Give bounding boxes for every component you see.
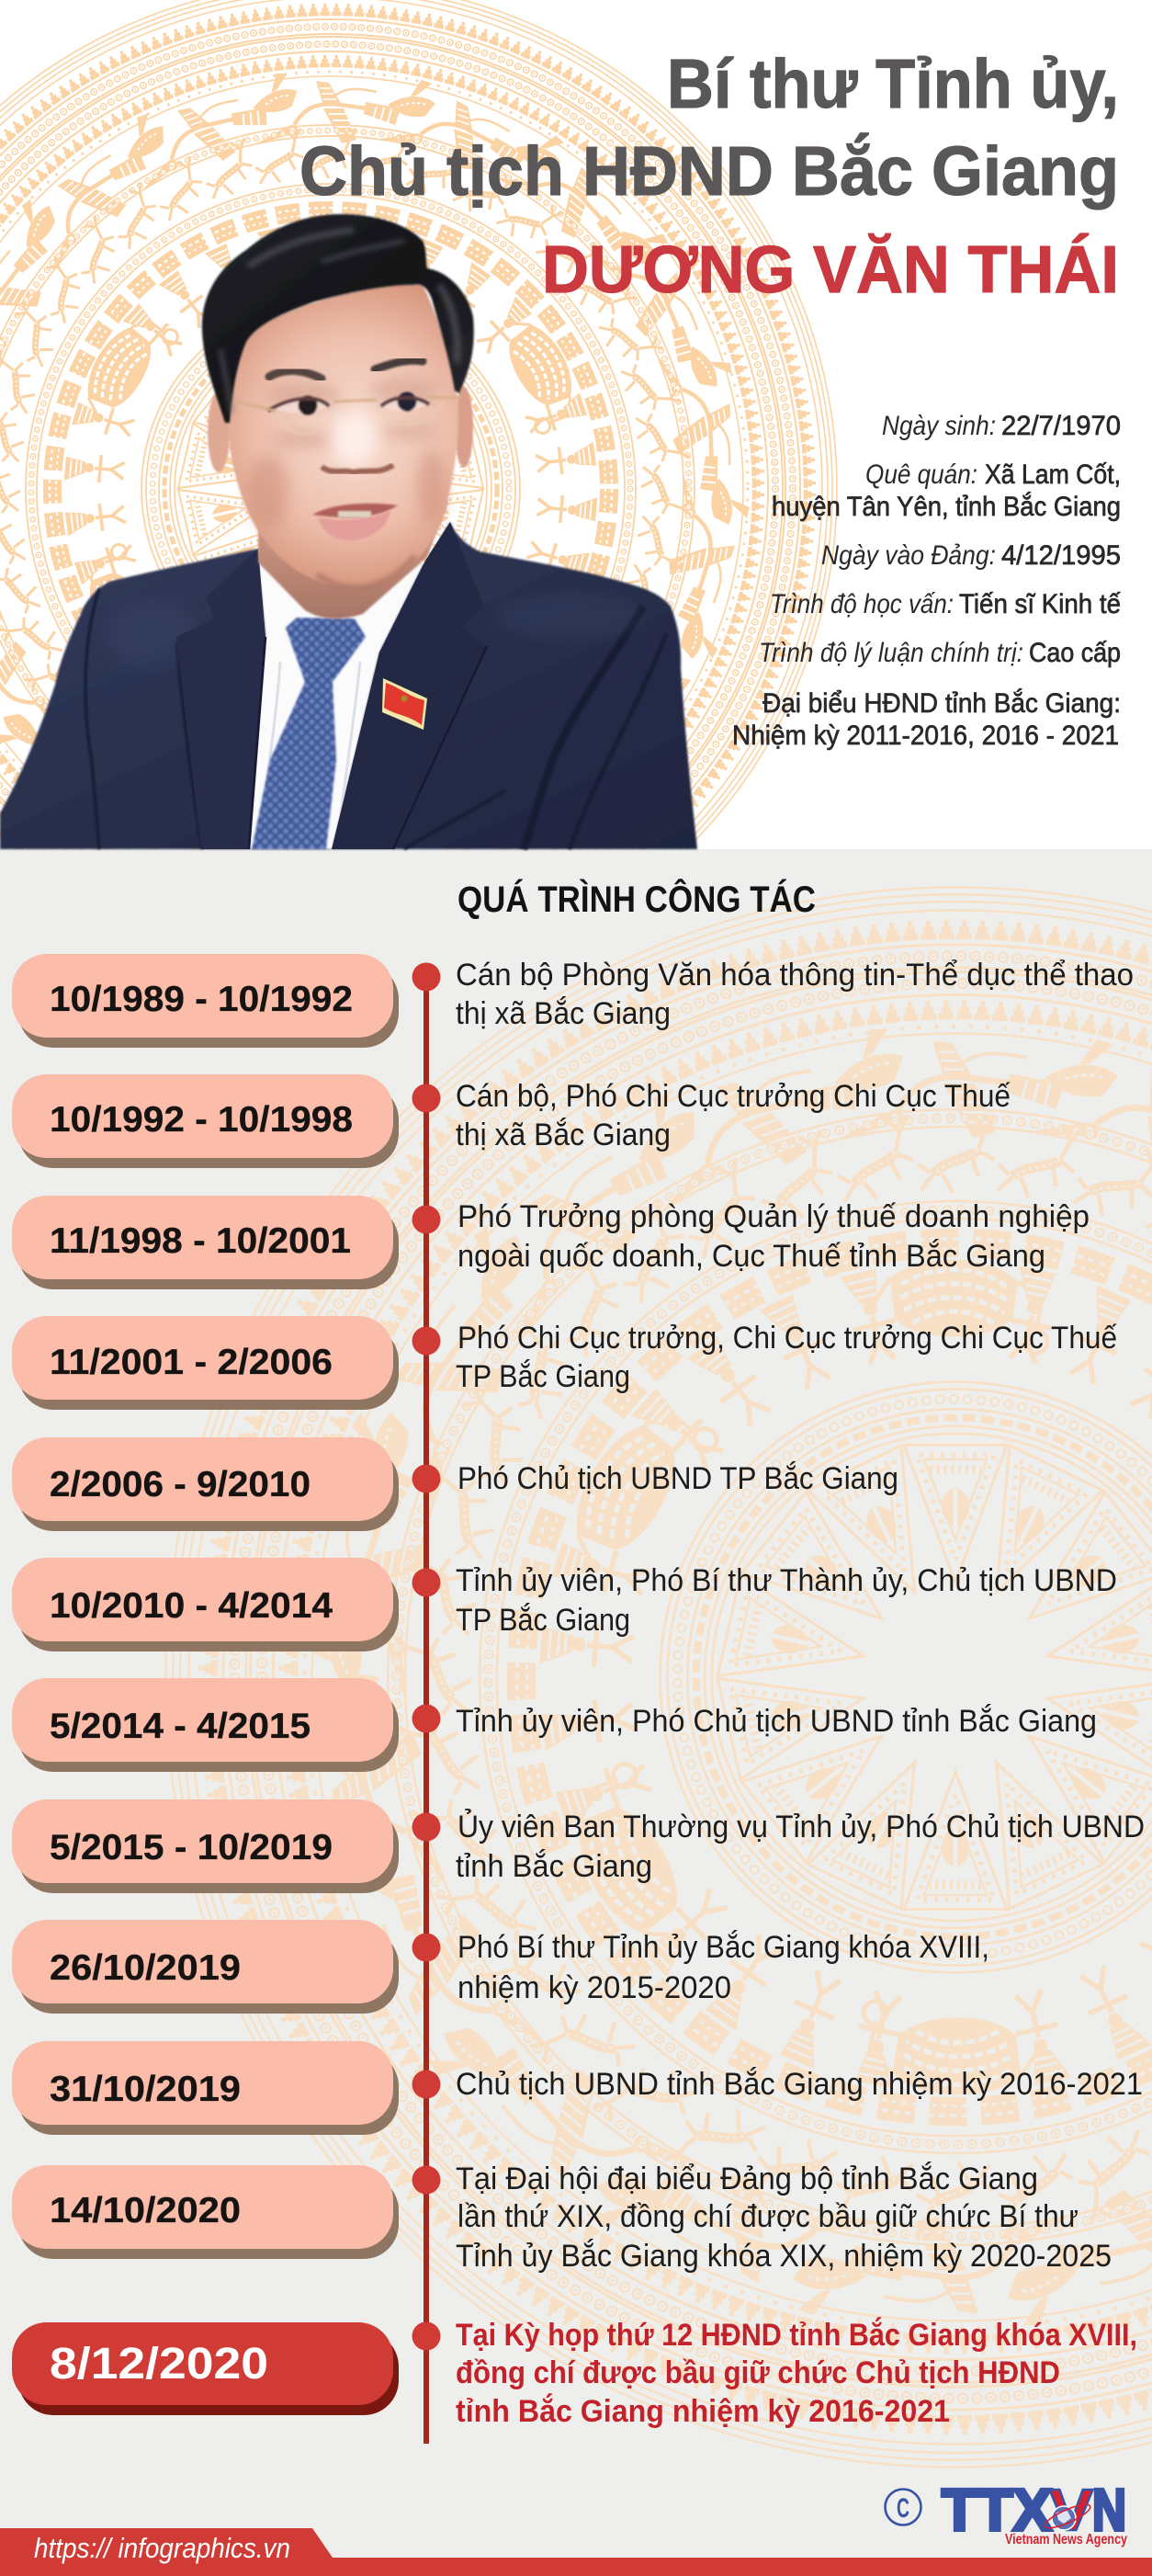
jacket folds and seams	[85, 588, 666, 849]
date pill	[12, 1799, 399, 1893]
marker dot	[412, 1465, 441, 1492]
date pill: 11/2001 - 2/2006	[50, 1343, 333, 1382]
description: TP Bắc Giang	[456, 1359, 630, 1394]
logo: TTXVN	[886, 2477, 1127, 2548]
date pill: 8/12/2020	[50, 2340, 268, 2389]
marker dot	[412, 1568, 441, 1597]
website url: https:// infographics.vn	[34, 2532, 290, 2564]
left lapel	[176, 549, 265, 849]
party entry date: 4/12/1995	[1001, 540, 1121, 571]
date pill	[12, 1920, 399, 2014]
description: Tại Đại hội đại biểu Đảng bộ tỉnh Bắc Giang	[456, 2162, 1038, 2196]
birth date	[882, 411, 1121, 441]
globe	[1042, 2501, 1093, 2532]
date pill: 31/10/2019	[50, 2070, 241, 2109]
marker dot	[412, 2321, 441, 2351]
description: Phó Trưởng phòng Quản lý thuế doanh nghiệp	[457, 1199, 1090, 1234]
hometown	[772, 460, 1121, 522]
date pill: 11/1998 - 10/2001	[50, 1221, 351, 1261]
date pill	[12, 2041, 399, 2135]
date pill: 14/10/2020	[50, 2191, 241, 2230]
marker dot	[412, 1206, 441, 1233]
date pill: 10/1989 - 10/1992	[50, 980, 353, 1019]
portrait photo	[0, 214, 697, 849]
marker dot	[412, 1327, 441, 1355]
description: Tỉnh ủy Bắc Giang khóa XIX, nhiệm kỳ 2020-2025	[456, 2239, 1112, 2274]
marker dot	[412, 963, 441, 991]
title	[299, 45, 1119, 307]
agency letters: V	[1049, 2477, 1093, 2543]
hair highlights	[220, 230, 457, 414]
timeline axis	[424, 977, 429, 2444]
nose highlight	[333, 412, 377, 467]
agency letters	[942, 2477, 1126, 2543]
education	[770, 589, 1121, 619]
timeline row 3	[12, 1196, 1090, 1289]
cheek shading	[248, 450, 446, 528]
left eyebrow	[269, 370, 322, 379]
description	[457, 1930, 989, 2005]
chin crease	[317, 556, 415, 587]
title line 1: Bí thư Tỉnh ủy,	[667, 45, 1119, 122]
birth date: 22/7/1970	[1001, 411, 1121, 441]
marker dot	[412, 1812, 441, 1842]
education: Tiến sĩ Kinh tế	[959, 589, 1121, 619]
political theory level: Cao cấp	[1029, 638, 1121, 668]
flag pin	[382, 678, 427, 730]
left eye	[268, 395, 329, 415]
date pill	[12, 1196, 399, 1289]
date pill	[12, 954, 399, 1048]
right eyebrow	[375, 360, 423, 369]
shirt	[249, 561, 425, 849]
agency letters: N	[1092, 2477, 1126, 2543]
copyright mark: C	[897, 2493, 909, 2524]
white header background	[0, 0, 1152, 849]
date pill: 5/2014 - 4/2015	[50, 1707, 311, 1746]
description: Phó Chủ tịch UBND TP Bắc Giang	[457, 1461, 898, 1496]
timeline row 6	[12, 1558, 1117, 1651]
party entry date: Ngày vào Đảng:	[821, 540, 996, 571]
description: Phó Chi Cục trưởng, Chi Cục trưởng Chi Cục Thuế	[457, 1321, 1117, 1356]
nostrils	[322, 465, 393, 472]
date pill: 2/2006 - 9/2010	[50, 1465, 311, 1504]
party entry date	[821, 540, 1121, 571]
timeline row 2	[12, 1074, 1011, 1168]
section heading: QUÁ TRÌNH CÔNG TÁC	[457, 878, 816, 920]
description	[456, 2162, 1112, 2274]
timeline row 12: highlighted	[12, 2318, 1137, 2429]
right lapel	[332, 522, 487, 849]
marker dot	[412, 1934, 441, 1961]
description	[457, 1199, 1090, 1274]
right ear	[455, 387, 473, 468]
marker dot	[412, 1704, 441, 1733]
date pill: 10/1992 - 10/1998	[50, 1100, 353, 1140]
date pill	[12, 1558, 399, 1651]
copyright mark	[886, 2489, 920, 2525]
education: Trình độ học vấn:	[770, 589, 954, 619]
timeline row 9	[12, 1920, 989, 2014]
jacket	[0, 522, 697, 849]
description: Tỉnh ủy viên, Phó Bí thư Thành ủy, Chủ tịch UBND	[456, 1563, 1117, 1598]
glasses	[236, 397, 459, 434]
hometown: huyện Tân Yên, tỉnh Bắc Giang	[772, 492, 1121, 522]
description: Cán bộ Phòng Văn hóa thông tin-Thể dục thể thao	[456, 958, 1134, 993]
birth date: Ngày sinh:	[882, 411, 996, 441]
hometown: Xã Lam Cốt,	[985, 460, 1121, 490]
face	[227, 284, 458, 587]
date pill: 5/2015 - 10/2019	[50, 1828, 333, 1867]
date pill: 26/10/2019	[50, 1948, 241, 1988]
lower lip	[318, 511, 390, 540]
red ribbon	[0, 2528, 1152, 2576]
description: TP Bắc Giang	[456, 1603, 630, 1638]
timeline row 5	[12, 1437, 898, 1531]
description: Tỉnh ủy viên, Phó Chủ tịch UBND tỉnh Bắc Giang	[456, 1704, 1097, 1739]
council delegate terms: Nhiệm kỳ 2011-2016, 2016 - 2021	[732, 721, 1119, 751]
description	[456, 1563, 1117, 1638]
description: thị xã Bắc Giang	[456, 996, 671, 1031]
description	[456, 1321, 1117, 1394]
description: ngoài quốc doanh, Cục Thuế tỉnh Bắc Giang	[457, 1239, 1045, 1274]
hometown: Quê quán:	[865, 460, 977, 490]
eye socket shading	[265, 379, 439, 448]
neck	[258, 501, 448, 618]
upper lip	[312, 504, 398, 517]
footer bar	[0, 2528, 1152, 2576]
timeline row 8	[12, 1799, 1145, 1893]
timeline row 11	[12, 2162, 1112, 2274]
description	[456, 1079, 1011, 1152]
biography text block	[732, 411, 1121, 751]
marker dot	[412, 2165, 441, 2195]
bronze drum pattern: career panel	[165, 887, 1152, 2468]
date pill	[12, 1437, 399, 1531]
date pill	[12, 2322, 399, 2415]
timeline row 1	[12, 954, 1134, 1048]
timeline row 7	[12, 1678, 1097, 1772]
hair	[202, 214, 474, 423]
description: lần thứ XIX, đồng chí được bầu giữ chức Bí thư	[457, 2199, 1079, 2234]
marker dot	[412, 1084, 441, 1112]
left ear	[208, 392, 230, 472]
timeline row 4	[12, 1316, 1117, 1410]
description	[456, 1810, 1145, 1884]
marker dot	[412, 2070, 441, 2099]
title line 2: Chủ tịch HĐND Bắc Giang	[299, 132, 1119, 210]
agency letters: TTX	[942, 2477, 1052, 2543]
date pill	[12, 1074, 399, 1168]
council delegate terms: Đại biểu HĐND tỉnh Bắc Giang:	[762, 688, 1121, 719]
date pill	[12, 1316, 399, 1410]
bronze drum pattern: header	[0, 0, 838, 849]
date pill: 10/2010 - 4/2014	[50, 1586, 333, 1626]
timeline row 10	[12, 2041, 1143, 2135]
political theory level: Trình độ lý luận chính trị:	[759, 638, 1023, 668]
description	[456, 958, 1134, 1031]
name: DƯƠNG VĂN THÁI	[542, 233, 1119, 307]
description: đồng chí được bầu giữ chức Chủ tịch HĐND	[456, 2355, 1060, 2390]
description: thị xã Bắc Giang	[456, 1118, 671, 1152]
shirt shadow	[259, 662, 360, 836]
description: Chủ tịch UBND tỉnh Bắc Giang nhiệm kỳ 2016-2021	[456, 2067, 1143, 2102]
date pill	[12, 2165, 399, 2259]
lapel edge	[249, 637, 487, 849]
description: Phó Bí thư Tỉnh ủy Bắc Giang khóa XVIII,	[457, 1930, 989, 1965]
description: nhiệm kỳ 2015-2020	[457, 1970, 731, 2005]
date pill	[12, 1678, 399, 1772]
description: Cán bộ, Phó Chi Cục trưởng Chi Cục Thuế	[456, 1079, 1011, 1114]
panel: career background	[0, 849, 1152, 2576]
council delegate terms	[732, 688, 1121, 751]
description	[456, 2318, 1137, 2429]
description: tỉnh Bắc Giang	[456, 1849, 652, 1884]
soft sleeve highlights	[106, 592, 643, 671]
teeth	[338, 511, 371, 517]
right eye	[381, 392, 429, 412]
description: tỉnh Bắc Giang nhiệm kỳ 2016-2021	[456, 2394, 950, 2429]
necktie	[252, 618, 366, 849]
